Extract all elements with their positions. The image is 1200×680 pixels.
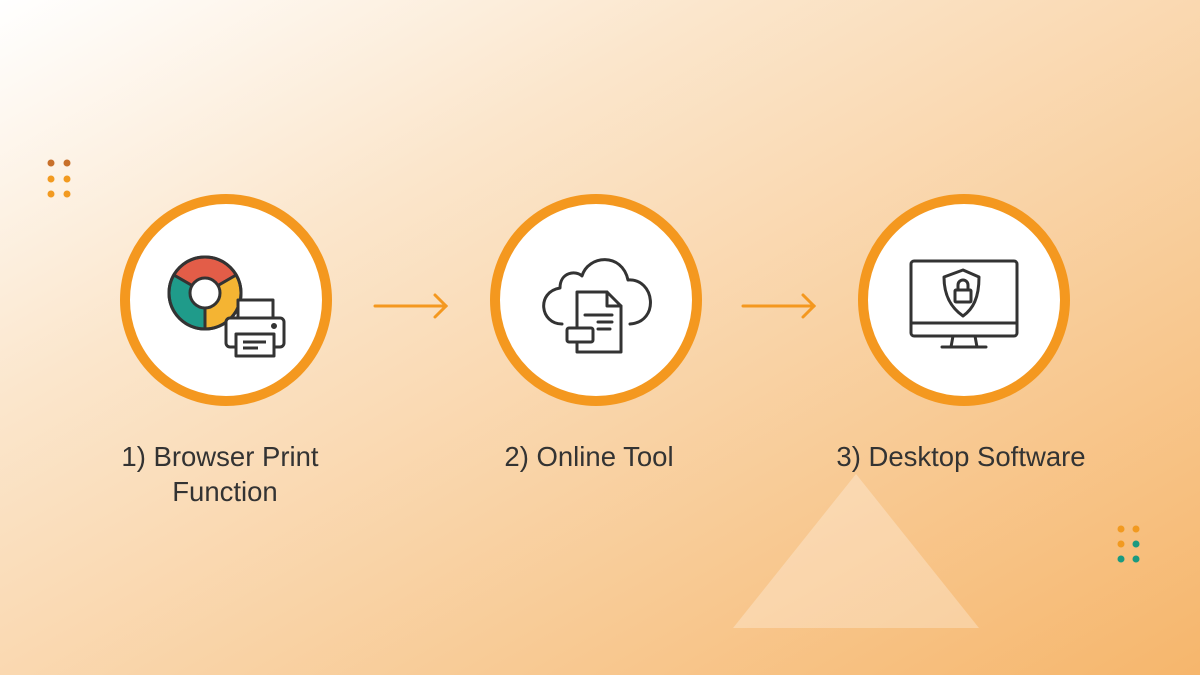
label 2: 2) Online Tool	[504, 441, 674, 472]
dots bottom-right	[1118, 526, 1140, 562]
arrow 1	[375, 295, 446, 317]
step 2 circle: online tool	[495, 199, 697, 401]
label 1: 1) Browser Print	[121, 441, 319, 472]
icon: chrome + printer	[169, 257, 284, 356]
arrow 2	[743, 295, 814, 317]
step 1 circle: browser print	[125, 199, 327, 401]
icon: cloud document	[544, 260, 650, 352]
label 3: 3) Desktop Software	[836, 441, 1086, 472]
icon: monitor shield lock	[911, 261, 1017, 347]
decorative triangle	[733, 474, 979, 628]
label 1: Function	[172, 476, 278, 507]
step 3 circle: desktop software	[863, 199, 1065, 401]
dots top-left	[48, 160, 70, 198]
